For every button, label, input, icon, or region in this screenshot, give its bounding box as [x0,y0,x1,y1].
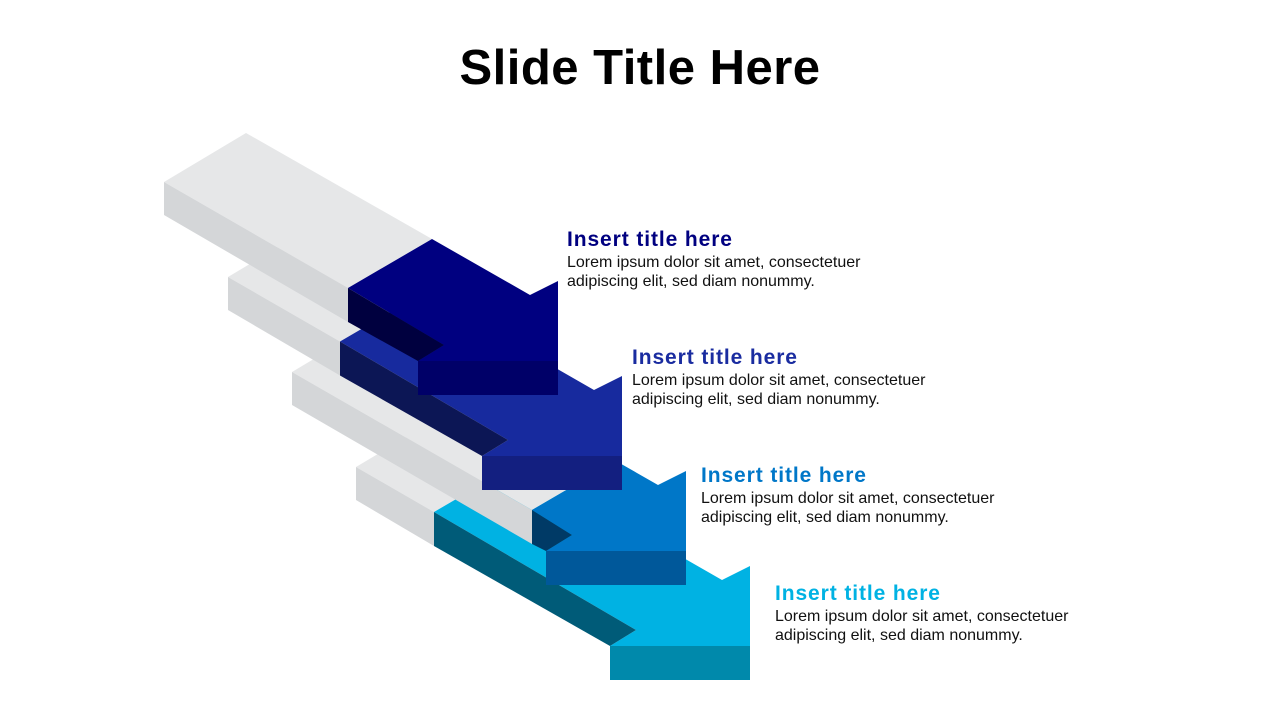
text block 3: Lorem ipsum dolor sit amet, consectetuer [701,490,994,507]
text block 3: Insert title here [701,464,867,487]
text block 1 [567,228,860,290]
text block 2: Lorem ipsum dolor sit amet, consectetuer [632,372,925,389]
text block 3: adipiscing elit, sed diam nonummy. [701,509,949,526]
step 4 arrow group [356,418,750,680]
text block 4: Lorem ipsum dolor sit amet, consectetuer [775,608,1068,625]
text block 1: Lorem ipsum dolor sit amet, consectetuer [567,254,860,271]
text block 3 [701,464,994,526]
text block 4 [775,582,1068,644]
title: Slide Title Here [459,41,821,95]
text block 1: Insert title here [567,228,733,251]
text block 2: Insert title here [632,346,798,369]
text block 2 [632,346,926,408]
text block 2: adipiscing elit, sed diam nonummy. [632,391,880,408]
step 1 arrow group [164,133,558,395]
text block 1: adipiscing elit, sed diam nonummy. [567,273,815,290]
step 2 arrow group [228,228,622,490]
text block 4: adipiscing elit, sed diam nonummy. [775,627,1023,644]
text block 4: Insert title here [775,582,941,605]
step 3 arrow group [292,323,686,585]
